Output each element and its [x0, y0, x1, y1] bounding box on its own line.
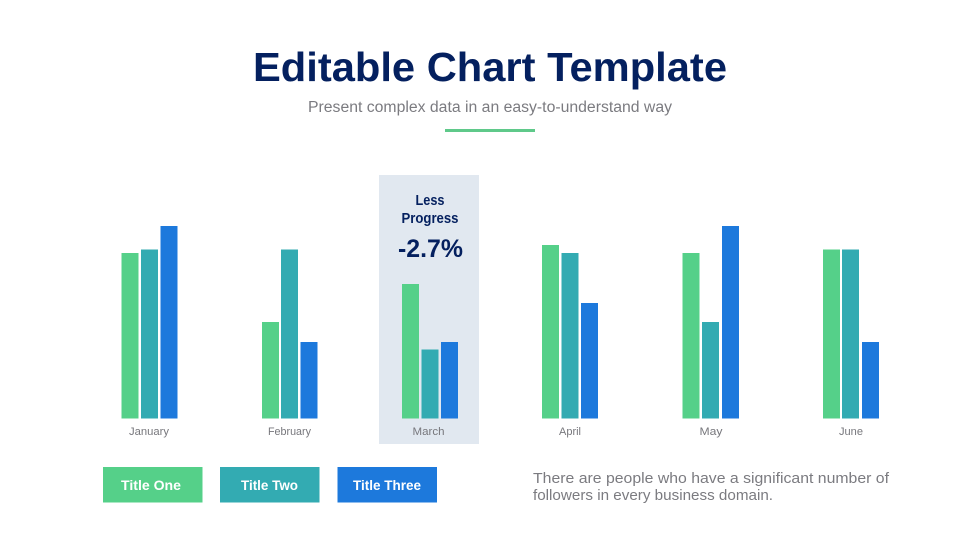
legend: Title Three: Title Three [353, 477, 421, 493]
description text [533, 470, 890, 504]
title accent line [445, 129, 535, 132]
bar group: May: May [700, 426, 723, 438]
legend: Title Two: Title Two [241, 477, 298, 493]
bar group: January [122, 226, 178, 438]
bar group: February [262, 250, 318, 438]
legend: Title One: Title One [121, 477, 181, 493]
legend: Title Two [220, 467, 320, 502]
bar group: April: April [559, 426, 581, 438]
bar group: June: June [839, 426, 863, 438]
callout: less progress: -2.7% [398, 235, 463, 263]
highlight panel: March [379, 175, 479, 444]
callout: less progress: Less [416, 193, 444, 209]
bar group: February: February [268, 426, 311, 438]
legend: Title One [103, 467, 202, 502]
description text: There are people who have a significant number of [533, 470, 890, 487]
legend: Title Three [338, 467, 437, 502]
bar group: March: March [412, 426, 444, 438]
title: Editable Chart Template [253, 44, 727, 90]
subtitle: Present complex data in an easy-to-understand way [308, 99, 672, 116]
callout: less progress [398, 193, 463, 263]
bar group: May [682, 226, 739, 438]
bar group: April [542, 245, 598, 438]
bar group: June [823, 250, 879, 438]
bar group: March [402, 284, 458, 438]
callout: less progress: Progress [402, 211, 458, 227]
bar group: January: January [129, 426, 170, 438]
description text: followers in every business domain. [533, 487, 773, 504]
